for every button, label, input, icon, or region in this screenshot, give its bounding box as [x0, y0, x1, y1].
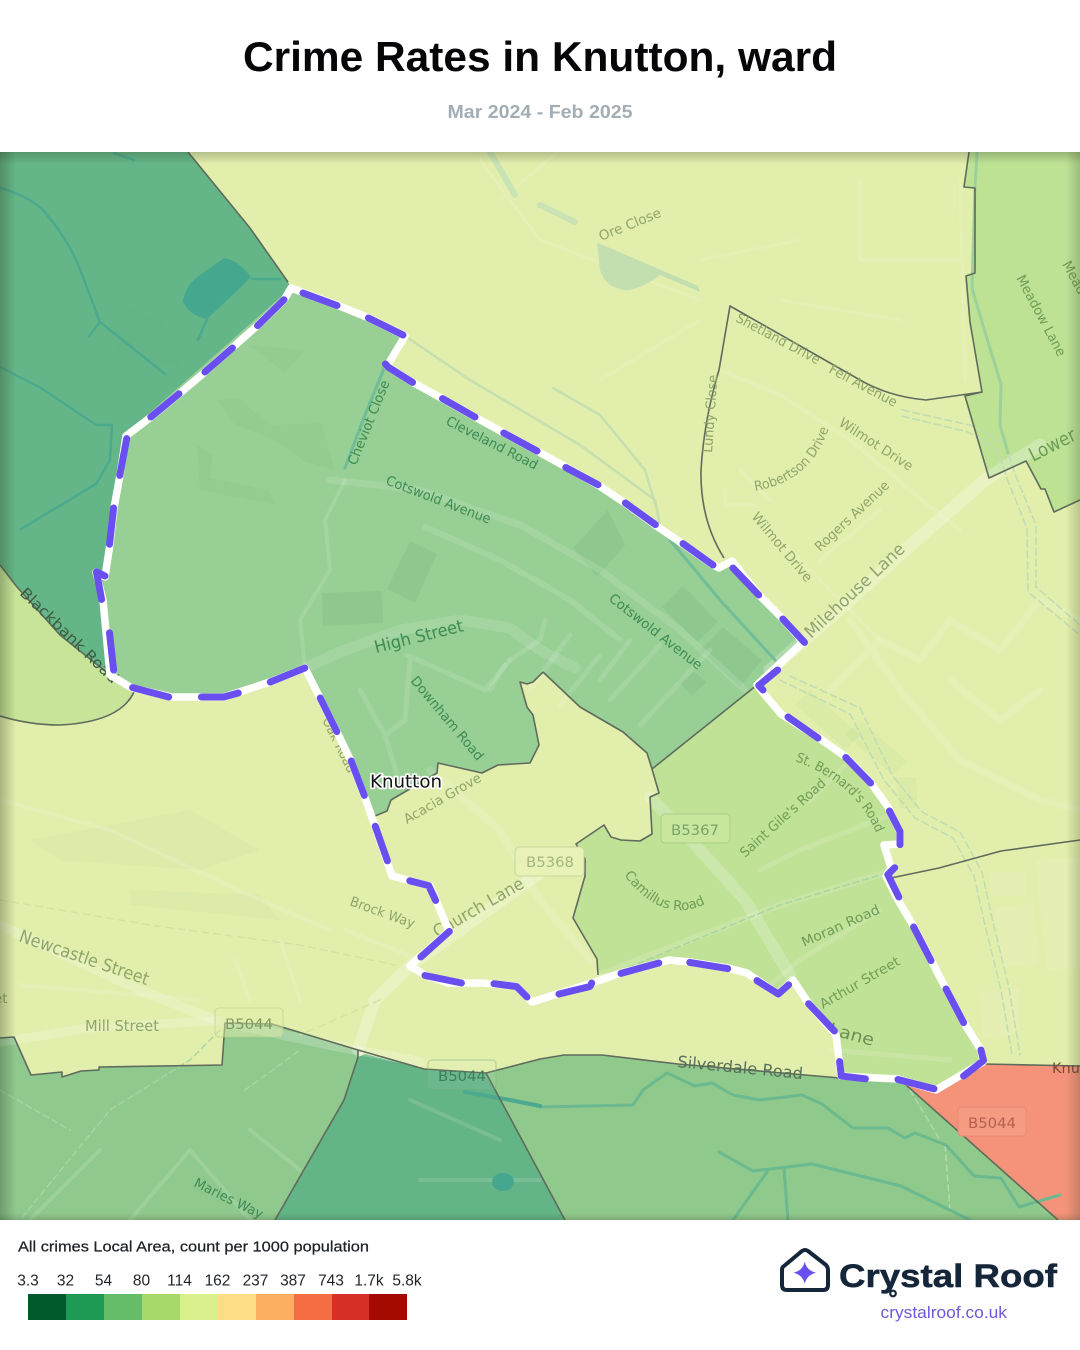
wordmark: Crystal Roof [839, 1258, 1057, 1294]
region: south-west green [0, 1023, 358, 1220]
street labels: Arthur Street [817, 954, 903, 1012]
street labels: Camillus Road [626, 871, 704, 910]
shield: B5044 west [215, 1008, 283, 1037]
legend tick labels: 387 [280, 1272, 306, 1290]
street labels: Wilmot Drive [748, 509, 815, 585]
shield: B5367 [661, 814, 730, 843]
street labels: Ore Close [597, 205, 664, 245]
shield: B5044 centre: B5044 [438, 1069, 486, 1085]
subtitle: date range: Mar 2024 - Feb 2025 [448, 101, 632, 122]
legend tick labels: 5.8k [392, 1272, 422, 1290]
water: southern stream [465, 1073, 1060, 1220]
legend tick labels: 1.7k [354, 1272, 384, 1290]
street labels: Lundy Close [700, 374, 721, 453]
street labels: Meadow Lane [1012, 272, 1069, 359]
shield: B5044 east [958, 1107, 1026, 1136]
shield: B5368: B5368 [526, 855, 574, 871]
map roads [0, 150, 1080, 1220]
street labels: Silverdale Road [677, 1052, 804, 1083]
website link: crystalroof.co.uk [880, 1304, 1008, 1322]
street labels: Oak Road [318, 715, 359, 776]
Crystal Roof logo [782, 1250, 1057, 1322]
region: south-west light green [0, 565, 134, 725]
region: north-east green [964, 152, 1080, 512]
legend colour scale [28, 1294, 407, 1320]
legend tick labels: 237 [243, 1272, 268, 1290]
street labels: Newcastle Street [16, 927, 152, 990]
street labels: Robertson Drive [754, 428, 828, 491]
water: northern pond and stream [345, 152, 1008, 660]
legend tick labels: 114 [167, 1272, 192, 1290]
shield: B5368 [515, 847, 584, 876]
shield: B5367: B5367 [671, 823, 719, 839]
map base area [0, 152, 1080, 1077]
region: red high-crime area [905, 1064, 1080, 1220]
choropleth map [0, 152, 1080, 1220]
street labels: Cotswold Avenue [606, 591, 705, 673]
map buildings and land use [845, 728, 860, 742]
region: south dark green [275, 1054, 565, 1220]
street labels: Rogers Avenue [812, 478, 893, 555]
region: ward north green [103, 288, 803, 816]
legend tick labels: 162 [205, 1272, 230, 1290]
street labels: Moran Road [799, 902, 882, 951]
title: Crime Rates in Knutton, ward [243, 33, 837, 80]
legend tick labels: 54 [95, 1272, 112, 1290]
area boundaries [0, 152, 1080, 1220]
street labels: Fell Avenue [826, 361, 900, 411]
street labels: High Street [372, 616, 466, 658]
map edge shading [0, 152, 1080, 1220]
street labels: Church Lane [430, 874, 528, 942]
street labels: Lane [827, 1020, 876, 1051]
shield: B5044 west: B5044 [225, 1017, 273, 1033]
legend tick labels: 32 [57, 1272, 74, 1290]
ward boundary: white base line [96, 288, 983, 1090]
icon: house with star [782, 1250, 828, 1290]
street labels: Saint Gile's Road [737, 775, 829, 861]
legend [17, 1238, 422, 1320]
street labels: Acacia Grove [401, 770, 484, 827]
region: north-west dark green [0, 152, 291, 675]
street labels: Mill Street [85, 1017, 159, 1035]
street labels: Brock Way [348, 894, 417, 932]
street labels: St. Bernard's Road [796, 752, 886, 832]
region: south-east green [486, 1055, 1058, 1220]
street labels: Maries Way [191, 1175, 266, 1222]
map rail and paths [0, 410, 1080, 1220]
street labels: Wilmot Drive [836, 415, 916, 475]
street labels: Milehouse Lane [801, 539, 909, 643]
place label: Knutton: Knutton [370, 772, 442, 792]
legend tick labels [17, 1272, 422, 1290]
ward boundary: purple dashes [96, 293, 983, 1089]
road shields [215, 814, 1026, 1136]
shield: B5044 east: B5044 [968, 1116, 1016, 1132]
street labels: Cleveland Road [443, 413, 540, 473]
shield: B5044 centre [428, 1060, 496, 1089]
legend tick labels: 743 [318, 1272, 344, 1290]
street labels: Shetland Drive [733, 310, 823, 368]
street labels [0, 210, 1080, 1262]
wordmark y tail [890, 1291, 896, 1296]
region: ward south-east light green [573, 685, 983, 1090]
legend title: All crimes Local Area, count per 1000 population [18, 1238, 369, 1256]
water: north-west lake and streams [0, 153, 280, 529]
street labels: Blackbank Road [16, 584, 122, 687]
street labels: Downham Road [407, 673, 487, 764]
legend tick labels: 80 [133, 1272, 150, 1290]
street labels: Cotswold Avenue [384, 473, 493, 528]
legend tick labels: 3.3 [17, 1272, 39, 1290]
street labels: Cheviot Close [345, 378, 393, 467]
